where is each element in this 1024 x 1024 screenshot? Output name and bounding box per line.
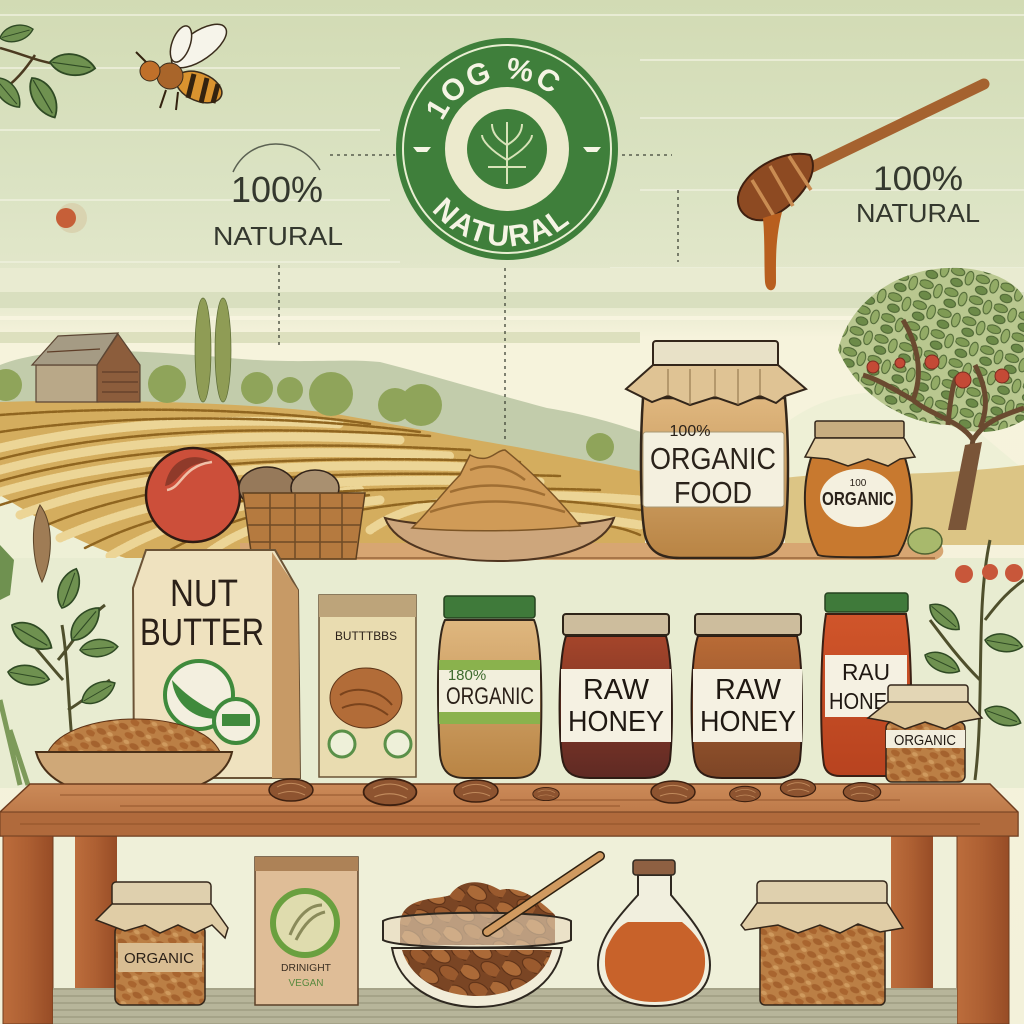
- farm landscape: [0, 298, 1024, 562]
- jar: organic green lid: 180%: [448, 667, 486, 684]
- bottle: honey syrup: [598, 860, 710, 1006]
- lower wall: [53, 836, 957, 990]
- jar: raw honey red: [821, 593, 911, 776]
- distant trees: [0, 365, 614, 461]
- bag: butter pouch: BUTTTBBS: [335, 629, 397, 643]
- icon: small green fruit: [908, 528, 942, 554]
- label: 100% natural left: NATURAL: [213, 221, 343, 251]
- jar: organic small: [805, 421, 915, 557]
- jar: lower right: [741, 881, 903, 1005]
- shelf upper: [0, 543, 1024, 788]
- bag: nut butter: NUT: [170, 573, 238, 615]
- bowl of nuts: [36, 719, 232, 797]
- cypress trees: [195, 298, 231, 402]
- jar: organic small nuts: ORGANIC: [894, 732, 956, 749]
- jar: organic lower left: ORGANIC: [124, 950, 194, 967]
- badge: 100% natural seal: NATURAL: [432, 197, 570, 246]
- table: [0, 784, 1018, 1024]
- label: 100% natural left: 100%: [231, 169, 323, 210]
- bag lower: [255, 857, 358, 1005]
- bag lower: VEGAN: [288, 978, 324, 989]
- basket: [239, 467, 365, 559]
- label: 100% natural right: 100%: [873, 160, 963, 198]
- badge: 100% natural seal: 1OG %C: [428, 58, 560, 120]
- jar: 100% organic food: ORGANIC: [650, 441, 776, 476]
- label: 100% natural right: [856, 160, 980, 228]
- jar: 100% organic food: FOOD: [674, 475, 752, 510]
- plate of nut butter: [385, 450, 614, 561]
- icon: branch top left: [0, 21, 97, 122]
- jar: raw honey dark: [560, 614, 672, 778]
- jar: raw honey dark: HONEY: [568, 706, 664, 738]
- icon: apple small: [56, 203, 87, 233]
- jar: raw honey red: HONE: [829, 688, 887, 714]
- label: 100% natural right: NATURAL: [856, 198, 980, 228]
- dashed connector lines: [279, 155, 678, 440]
- field rows: [0, 410, 640, 556]
- jar: raw honey light: RAW: [715, 674, 782, 706]
- bag: nut butter: [133, 550, 300, 778]
- bag lower: DRINIGHT: [281, 963, 331, 974]
- jar: raw honey light: [692, 614, 802, 778]
- jar: organic small: 100: [850, 478, 867, 489]
- nuts on table: [269, 779, 881, 805]
- jar: raw honey red: RAU: [842, 659, 890, 685]
- bag: butter pouch: [319, 595, 416, 777]
- jar: 100% organic food: 100%: [670, 423, 710, 440]
- icon: bee: [136, 16, 233, 110]
- badge: 100% natural seal: [396, 38, 618, 260]
- jar: raw honey dark: RAW: [583, 674, 650, 706]
- label: 100% natural left: [213, 144, 343, 251]
- bag: nut butter: BUTTER: [140, 612, 264, 654]
- plant left: [0, 505, 119, 785]
- glass bowl with nuts and spoon: [383, 856, 600, 1007]
- jar: organic green lid: ORGANIC: [446, 683, 534, 710]
- jar: organic green lid: [438, 596, 541, 778]
- icon: honey dipper: [738, 84, 984, 290]
- jar: raw honey light: HONEY: [700, 706, 796, 738]
- farmhouse: [32, 333, 140, 402]
- jar: organic small nuts: [868, 685, 982, 782]
- jar: organic small: ORGANIC: [822, 489, 894, 509]
- tree right: [838, 268, 1024, 530]
- jar: 100% organic food: [626, 341, 806, 558]
- jar: organic lower left: [96, 882, 228, 1005]
- icon: peach: [146, 448, 240, 542]
- plant right: [922, 540, 1024, 780]
- floor: [53, 988, 957, 1024]
